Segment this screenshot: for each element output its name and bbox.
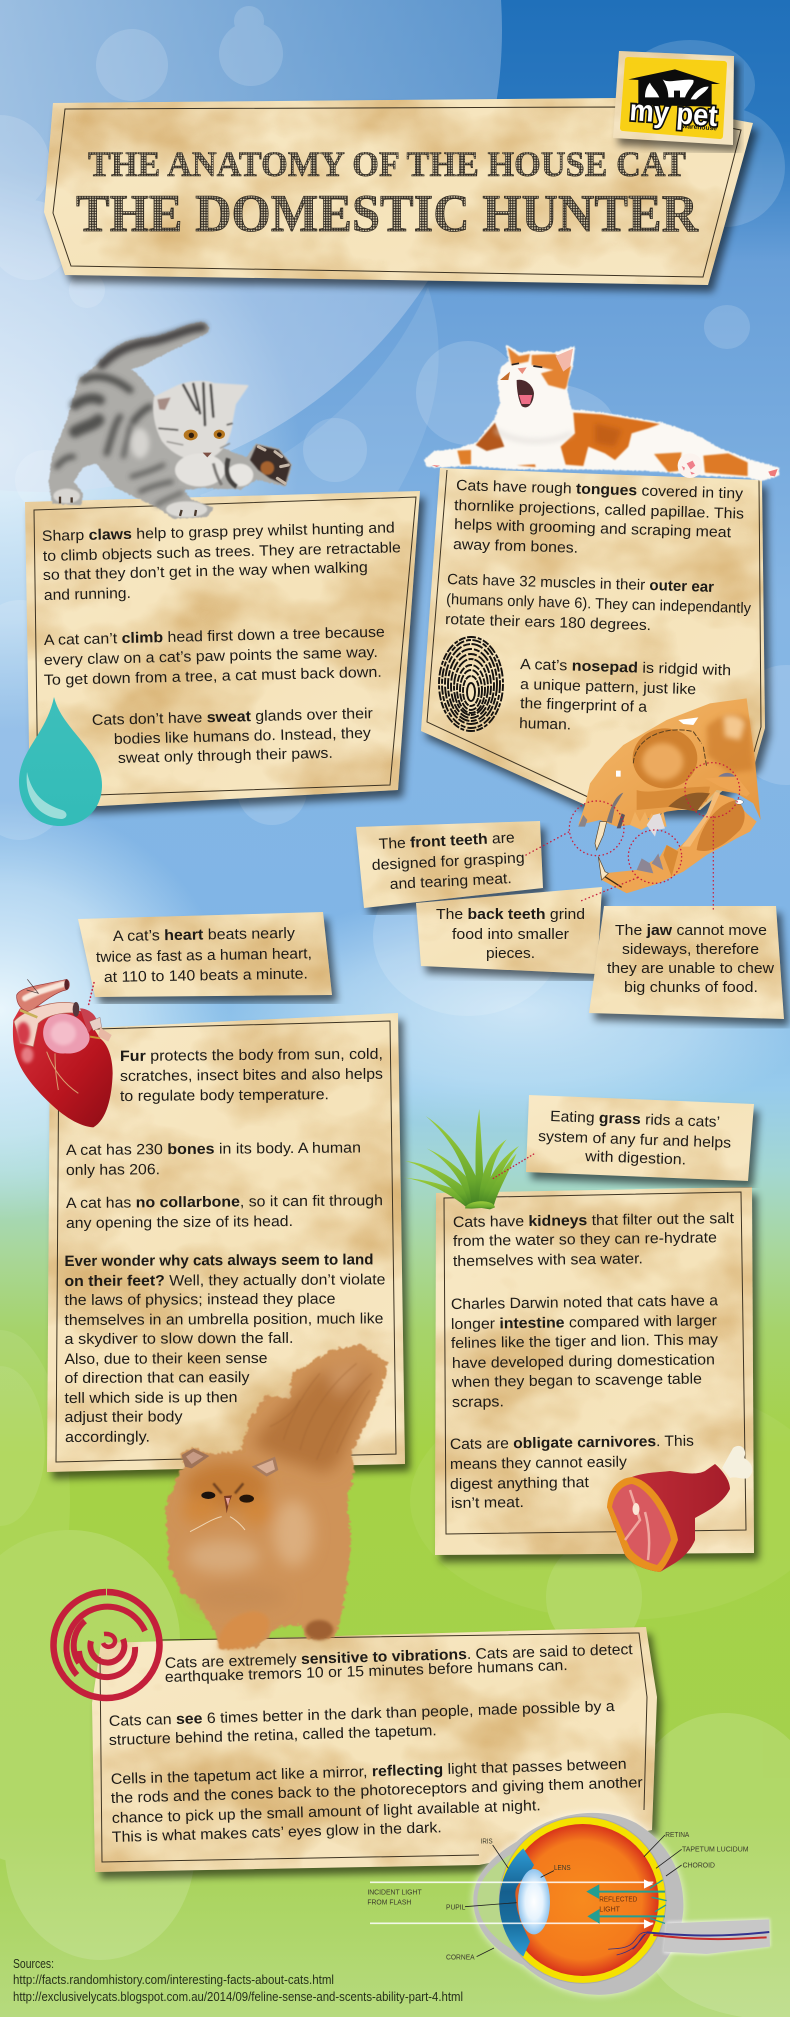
- text: carnivores: digest anything that: [450, 1474, 590, 1493]
- text: kidneys: themselves with sea water.: [453, 1250, 643, 1270]
- icon: fingerprint: [439, 637, 503, 731]
- note: jaw: big chunks of food.: [624, 979, 758, 996]
- icon: water drop: [19, 697, 102, 826]
- note: front teeth: and tearing meat.: [389, 870, 512, 893]
- eye labels: IRIS: [481, 1838, 493, 1845]
- note: back teeth: [416, 887, 602, 974]
- sources: [13, 1957, 463, 2004]
- text: fur: scratches, insect bites and also helps: [120, 1066, 383, 1085]
- text: landing on feet: accordingly.: [65, 1429, 150, 1446]
- text: climb: [44, 624, 385, 689]
- text: landing on feet: adjust their body: [64, 1408, 183, 1426]
- text: intestine: when they began to scavenge table: [451, 1371, 702, 1391]
- text: bones: only has 206.: [66, 1161, 160, 1179]
- text: landing on feet: of direction that can easily: [64, 1369, 250, 1387]
- note: jaw: [589, 906, 784, 1019]
- note: back teeth: pieces.: [486, 945, 535, 962]
- text: intestine: longer intestine compared with larger: [451, 1312, 717, 1333]
- title line 2: THE DOMESTIC HUNTER: [76, 185, 699, 243]
- text: tongues: away from bones.: [453, 536, 578, 557]
- text: reflecting: [111, 1756, 643, 1846]
- text: climb: every claw on a cat’s paw points the same way.: [44, 644, 378, 669]
- text: fur: to regulate body temperature.: [120, 1086, 329, 1105]
- text: landing on feet: a skydiver to slow down the fall.: [64, 1330, 294, 1348]
- text: tongues: helps with grooming and scraping meat: [454, 516, 732, 541]
- eye labels: LENS: [554, 1865, 571, 1872]
- note: jaw: they are unable to chew: [607, 960, 774, 977]
- logo: my pet warehouse: [613, 51, 734, 145]
- text: vibrations: Cats are extremely sensitive to vibrations . Cats are said to detect: [165, 1641, 634, 1672]
- text: sight: structure behind the retina, called the tapetum.: [109, 1722, 437, 1749]
- text: sight: Cats can see 6 times better in the dark than people, made possible by a: [109, 1698, 616, 1730]
- text: claws: and running.: [44, 585, 131, 604]
- text: claws: Sharp claws help to grasp prey whilst hunting and: [42, 519, 395, 545]
- title line 1: THE ANATOMY OF THE HOUSE CAT: [88, 144, 686, 184]
- logo: my pet warehouse: my pet: [629, 94, 719, 133]
- eye labels: PUPIL: [446, 1904, 465, 1911]
- illustration: ginger and white cat yawning: [425, 346, 778, 480]
- text: climb: To get down from a tree, a cat must back down.: [44, 664, 382, 689]
- illustration: anatomical heart: [13, 979, 113, 1127]
- note: heart: at 110 to 140 beats a minute.: [104, 965, 308, 986]
- text: sweat: bodies like humans do. Instead, they: [114, 725, 372, 748]
- text: nosepad: the fingerprint of a: [520, 695, 648, 716]
- callouts: dotted circles and leaders: [526, 763, 740, 910]
- text: landing on feet: the laws of physics; instead they place: [64, 1291, 336, 1309]
- panel: vibrations and sight: [92, 1627, 657, 1872]
- text: climb: A cat can’t climb head first down a tree because: [44, 624, 385, 649]
- text: carnivores: [450, 1433, 694, 1512]
- text: carnivores: isn’t meat.: [451, 1494, 524, 1512]
- text: intestine: scraps.: [452, 1393, 504, 1411]
- text: fur: [120, 1046, 383, 1105]
- text: nosepad: a unique pattern, just like: [520, 676, 696, 698]
- panel: claws: [19, 491, 420, 826]
- text: collarbone: [66, 1192, 383, 1232]
- icon: ham: [607, 1446, 752, 1572]
- text: sweat: [92, 705, 373, 767]
- text: bones: [66, 1139, 361, 1179]
- text: landing on feet: tell which side is up then: [64, 1389, 238, 1407]
- eye labels: REFLECTED: [599, 1897, 637, 1904]
- text: intestine: [451, 1292, 719, 1411]
- note: front teeth: The front teeth are: [378, 829, 515, 853]
- note: grass: Eating grass rids a cats’: [550, 1108, 720, 1131]
- text: landing on feet: on their feet? Well, they actually don’t violate: [64, 1271, 386, 1290]
- illustration: grey tabby kitten: [50, 323, 291, 517]
- text: outer ear: (humans only have 6). They can independantly: [446, 591, 752, 617]
- panel: fur, bones and landing: [47, 1013, 405, 1472]
- text: claws: so that they don’t get in the way when walking: [43, 559, 368, 584]
- illustration: grass: [403, 1109, 535, 1209]
- sources: http://facts.randomhistory.com/interesting-facts-about-cats.html: [13, 1973, 334, 1987]
- logo: my pet warehouse: warehouse: [681, 123, 718, 132]
- text: nosepad: [519, 656, 731, 734]
- note: jaw: The jaw cannot move: [615, 922, 767, 939]
- text: landing on feet: Also, due to their keen sense: [64, 1350, 268, 1368]
- text: collarbone: any opening the size of its head.: [66, 1213, 293, 1232]
- sources: http://exclusivelycats.blogspot.com.au/2014/09/feline-sense-and-scents-ability-part-4.html: [13, 1990, 463, 2004]
- note: heart: A cat’s heart beats nearly: [113, 925, 296, 945]
- text: reflecting: the rods and the cones back to the photoreceptors and giving them another: [111, 1774, 643, 1807]
- text: claws: to climb objects such as trees. They are retractable: [43, 539, 401, 565]
- eye labels: FROM FLASH: [367, 1900, 411, 1907]
- sources: Sources:: [13, 1957, 54, 1971]
- text: landing on feet: themselves in an umbrella position, much like: [64, 1310, 384, 1329]
- icon: vibration spiral: [53, 1592, 160, 1698]
- text: landing on feet: [64, 1251, 386, 1446]
- text: outer ear: rotate their ears 180 degrees.: [445, 611, 651, 634]
- illustration: cat skull: [526, 698, 761, 910]
- text: outer ear: Cats have 32 muscles in their outer ear: [447, 571, 714, 596]
- text: landing on feet: Ever wonder why cats always seem to land: [64, 1251, 374, 1270]
- text: intestine: have developed during domestication: [452, 1351, 715, 1372]
- note: grass: [526, 1095, 754, 1181]
- panel: kidneys, intestine and carnivores: [435, 1187, 754, 1572]
- note: back teeth: The back teeth grind: [436, 906, 585, 923]
- text: nosepad: human.: [519, 715, 571, 734]
- illustration: persian cat: [167, 1345, 387, 1649]
- text: tongues: thornlike projections, called papillae. This: [454, 497, 744, 523]
- text: intestine: felines like the tiger and lion. This may: [451, 1331, 719, 1352]
- eye labels: TAPETUM LUCIDUM: [682, 1846, 749, 1853]
- note: heart: [78, 912, 332, 997]
- text: reflecting: This is what makes cats’ eyes glow in the dark.: [112, 1819, 442, 1846]
- text: kidneys: Cats have kidneys that filter out the salt: [453, 1210, 735, 1231]
- eye labels: CHOROID: [683, 1863, 715, 1870]
- text: kidneys: from the water so they can re-hydrate: [453, 1229, 717, 1250]
- eye labels: INCIDENT LIGHT: [367, 1890, 422, 1897]
- text: reflecting: chance to pick up the small amount of light available at night.: [112, 1797, 541, 1827]
- text: collarbone: A cat has no collarbone , so it can fit through: [66, 1192, 383, 1212]
- title banner: [44, 98, 753, 285]
- text: bones: A cat has 230 bones in its body. A human: [66, 1139, 361, 1159]
- text: vibrations: [165, 1641, 634, 1686]
- note: front teeth: designed for grasping: [371, 850, 525, 874]
- note: back teeth: food into smaller: [452, 926, 569, 943]
- eye labels: CORNEA: [446, 1954, 475, 1961]
- illustration: eye diagram: [367, 1813, 771, 1995]
- note: front teeth: [356, 821, 543, 908]
- text: sweat: sweat only through their paws.: [118, 745, 333, 767]
- text: fur: Fur protects the body from sun, cold,: [120, 1046, 383, 1065]
- text: tongues: Cats have rough tongues covered in tiny: [456, 477, 744, 503]
- text: carnivores: Cats are obligate carnivores . This: [450, 1433, 694, 1453]
- text: carnivores: means they cannot easily: [450, 1454, 628, 1473]
- text: nosepad: A cat’s nosepad is ridgid with: [520, 656, 731, 679]
- text: kidneys: [453, 1210, 735, 1270]
- text: claws: [42, 519, 401, 604]
- note: grass: with digestion.: [584, 1148, 686, 1169]
- note: jaw: sideways, therefore: [622, 941, 759, 958]
- text: outer ear: [445, 571, 752, 634]
- eye labels: [367, 1832, 749, 1961]
- eye labels: LIGHT: [599, 1906, 621, 1913]
- text: reflecting: Cells in the tapetum act like a mirror, reflecting light that passes between: [111, 1756, 627, 1788]
- text: vibrations: earthquake tremors 10 or 15 minutes before humans can.: [165, 1657, 568, 1686]
- text: sweat: Cats don’t have sweat glands over their: [92, 705, 373, 729]
- note: grass: system of any fur and helps: [538, 1128, 731, 1152]
- note: heart: twice as fast as a human heart,: [96, 945, 312, 966]
- text: intestine: Charles Darwin noted that cats have a: [451, 1292, 719, 1313]
- text: sight: [109, 1698, 616, 1749]
- eye labels: RETINA: [665, 1832, 690, 1839]
- text: tongues: [453, 477, 744, 557]
- panel: tongues, ears and nosepad: [421, 468, 765, 810]
